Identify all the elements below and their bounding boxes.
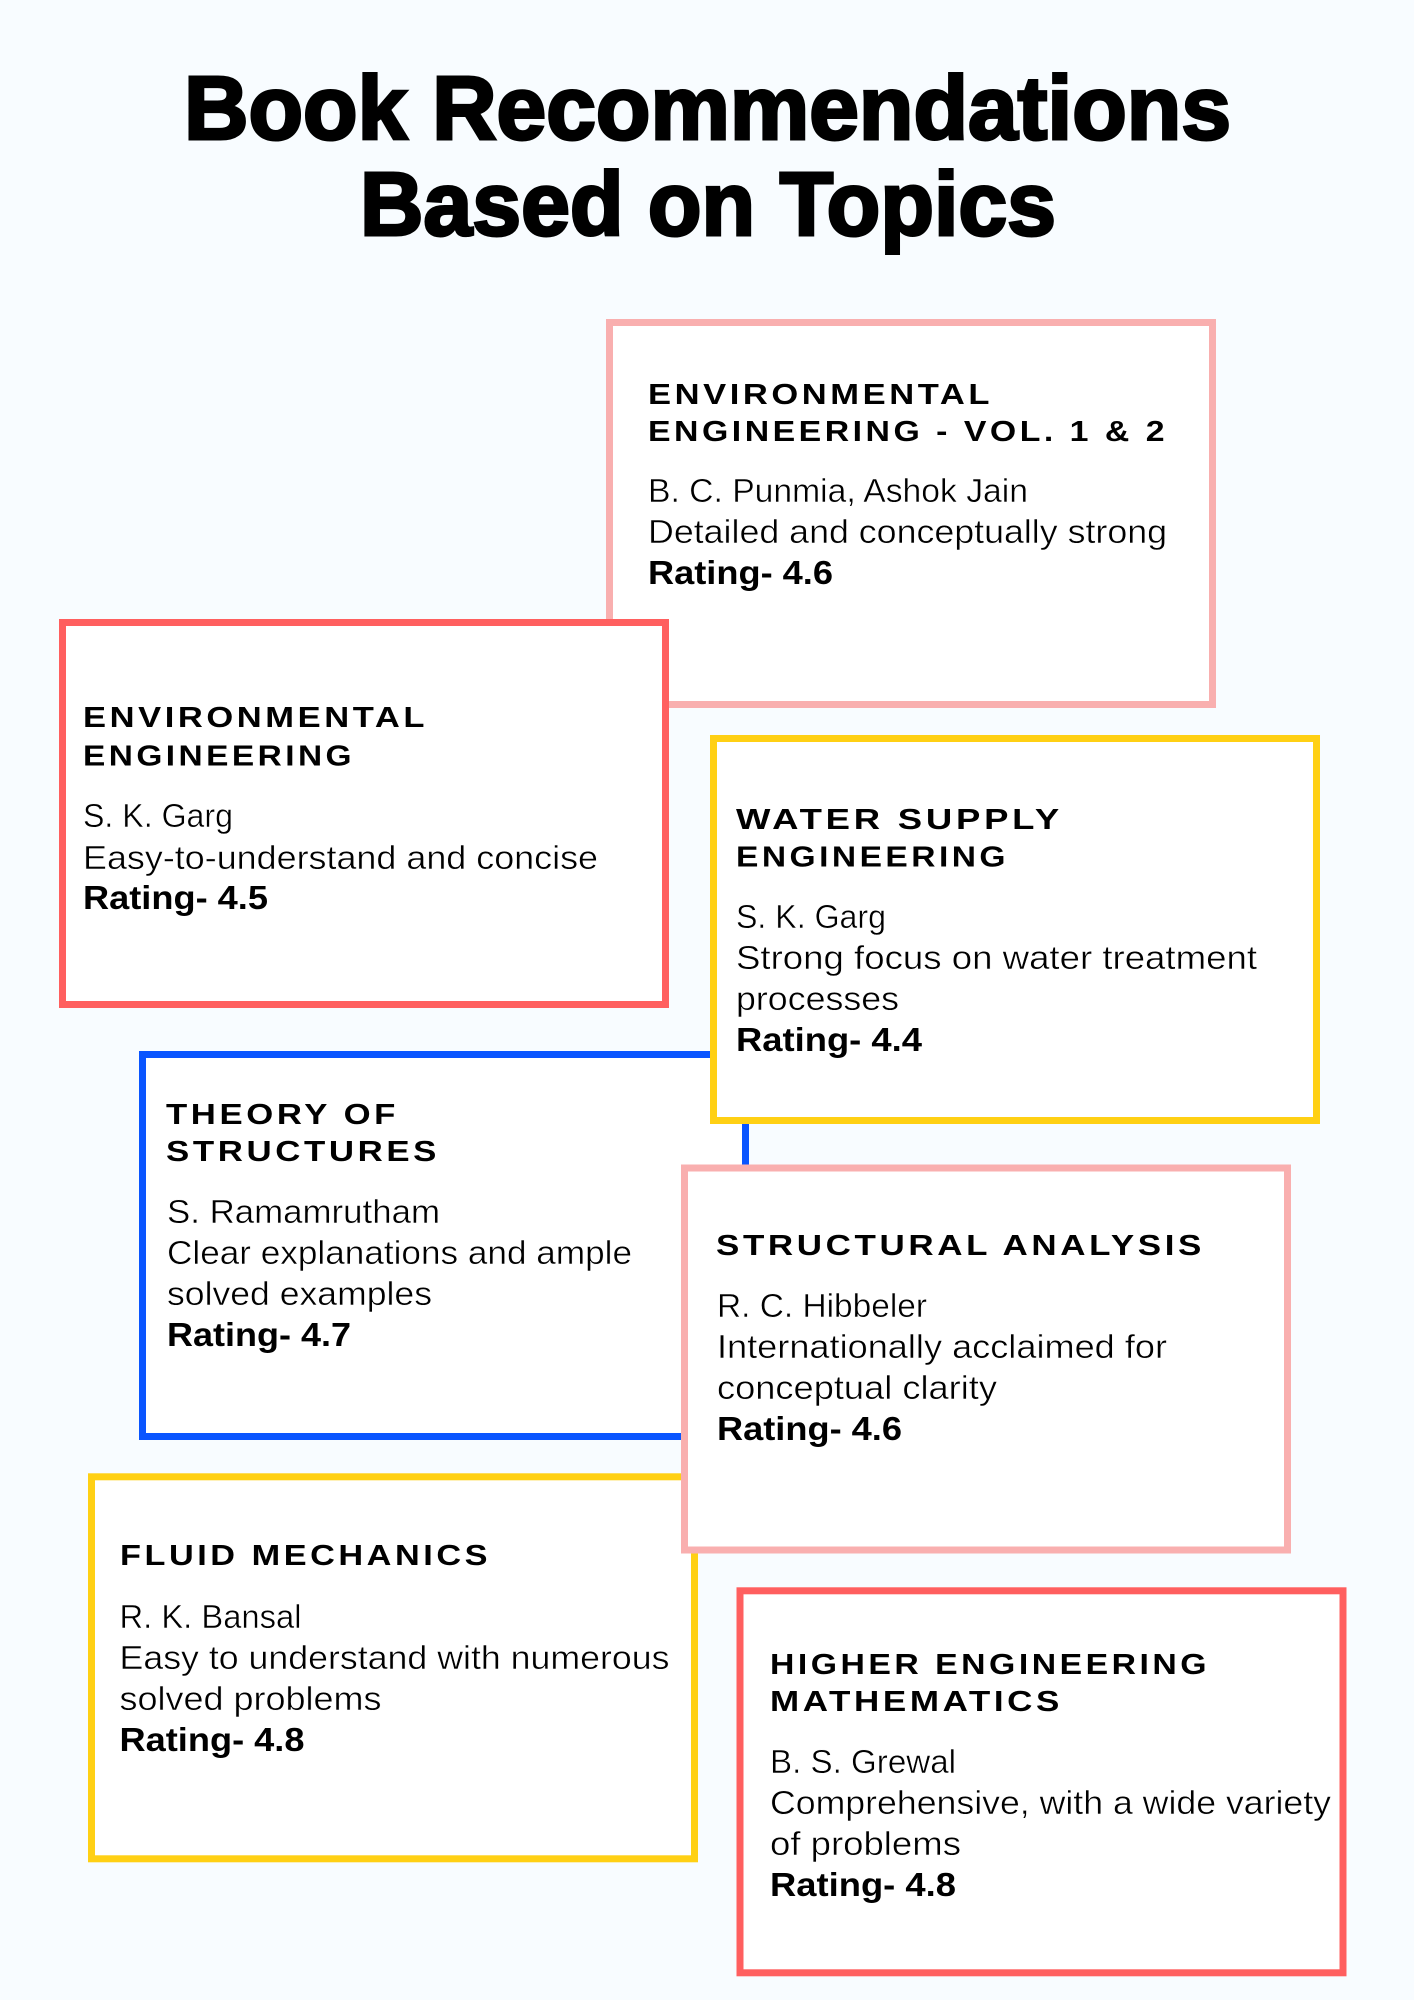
text: author and note [770,1743,1332,1862]
heading: Environmental Engineering [83,702,428,772]
title [184,59,1231,255]
text: author and note: solved problems [120,1680,382,1717]
text: author and note [167,1193,632,1312]
panel: Environmental Engineering [62,622,666,1004]
text: author and note: solved examples [167,1275,432,1312]
text: author and note [736,898,1257,1017]
rating: Rating- 4.8 [120,1721,304,1758]
heading: Theory of Structures [166,1099,440,1168]
heading: Water Supply Engineering: ENGINEERING [736,842,1009,874]
text: author and note [83,797,598,876]
rating: Rating- 4.5 [83,879,268,916]
heading: Higher Engineering Mathematics: MATHEMATICS [770,1686,1063,1718]
rating: Rating- 4.8 [770,1866,956,1903]
text: author and note: R. K. Bansal [120,1598,302,1635]
text: author and note: S. Ramamrutham [167,1193,440,1230]
panel: Higher Engineering Mathematics [740,1591,1343,1973]
text: author and note: B. C. Punmia, Ashok Jain [648,472,1028,509]
heading: Higher Engineering Mathematics: HIGHER ENGINEERING [770,1649,1210,1681]
heading: Higher Engineering Mathematics [770,1649,1210,1718]
text: author and note: S. K. Garg [736,898,886,935]
text: author and note: conceptual clarity [717,1369,998,1406]
panel: Structural Analysis [684,1168,1288,1550]
panel: Water Supply Engineering [714,738,1316,1120]
rating: Rating- 4.6 [717,1410,902,1447]
panel: Environmental Engineering Vol. 1 & 2 [610,322,1212,704]
heading: Water Supply Engineering [736,804,1063,874]
text: author and note: Internationally acclaimed for [717,1328,1167,1365]
panel: Fluid Mechanics [92,1477,694,1859]
rating: Rating- 4.6 [648,554,833,591]
text: author and note: R. C. Hibbeler [717,1287,927,1324]
text: author and note: S. K. Garg [83,797,233,834]
heading: Environmental Engineering Vol. 1 & 2 [648,379,1168,448]
heading: Theory of Structures: THEORY OF [166,1099,399,1131]
title: Based on Topics [360,155,1056,255]
heading: Environmental Engineering Vol. 1 & 2: ENVIRONMENTAL [648,379,993,411]
text: author and note [120,1598,670,1717]
text: author and note: Easy to understand with numerous [120,1639,670,1676]
text: author and note: processes [736,980,899,1017]
heading: Environmental Engineering: ENGINEERING [83,740,355,772]
heading: Water Supply Engineering: WATER SUPPLY [736,804,1063,836]
heading: Structural Analysis: STRUCTURAL ANALYSIS [716,1230,1205,1262]
text: author and note: Clear explanations and ample [167,1234,632,1271]
heading: Environmental Engineering Vol. 1 & 2: ENGINEERING - VOL. 1 & 2 [648,416,1168,448]
heading: Fluid Mechanics: FLUID MECHANICS [120,1540,491,1572]
text: author and note: of problems [770,1825,961,1862]
heading: Environmental Engineering: ENVIRONMENTAL [83,702,428,734]
text: author and note: Comprehensive, with a wide variety [770,1784,1332,1821]
rating: Rating- 4.7 [167,1316,351,1353]
text: author and note: Detailed and conceptually strong [648,513,1167,550]
text: author and note: Strong focus on water treatment [736,939,1257,976]
panel: Theory of Structures [142,1054,746,1436]
text: author and note [648,472,1167,550]
text: author and note [717,1287,1167,1406]
text: author and note: Easy-to-understand and concise [83,839,598,876]
heading: Theory of Structures: STRUCTURES [166,1136,440,1168]
rating: Rating- 4.4 [736,1021,923,1058]
text: author and note: B. S. Grewal [770,1743,956,1780]
title: Book Recommendations [184,59,1231,159]
